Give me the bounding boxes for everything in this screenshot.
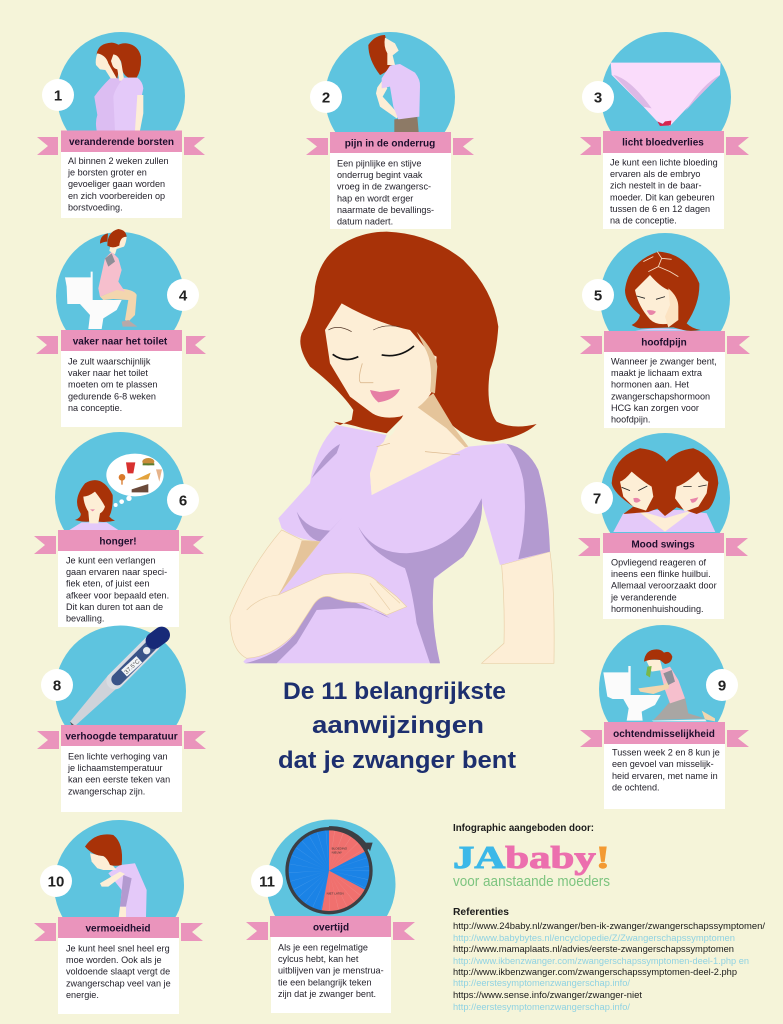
number 3: 3 xyxy=(594,90,602,106)
panel: 5 hoofdpijn xyxy=(580,233,750,428)
text box xyxy=(58,551,179,627)
number 11 xyxy=(251,865,283,897)
text box: Opvliegend reageren of xyxy=(611,558,707,568)
text box: energie. xyxy=(66,990,99,1000)
references xyxy=(453,906,766,1012)
icon: two faces back to back xyxy=(612,448,718,532)
text box: Je kunt een lichte bloeding xyxy=(610,158,718,168)
hair xyxy=(300,232,537,442)
text box: onderrug begint vaak xyxy=(337,170,423,180)
text box: moe worden. Ook als je xyxy=(66,955,162,965)
number 5 xyxy=(582,279,614,311)
logo: JAbaby: voor aanstaande moeders xyxy=(453,873,610,890)
text box: Je zult waarschijnlijk xyxy=(68,356,151,366)
text box: tie een belangrijk teken xyxy=(278,977,372,987)
text box: Een pijnlijke en stijve xyxy=(337,158,421,168)
title: De 11 belangrijkste xyxy=(283,678,506,705)
text box xyxy=(330,153,451,229)
icon: woman holding lower back xyxy=(368,35,420,132)
text box: hormonenhuishouding. xyxy=(611,604,704,614)
number 11: 11 xyxy=(259,874,275,890)
text box xyxy=(603,553,724,619)
text box: je veranderende xyxy=(610,592,677,602)
text box: naarmate de bevallings- xyxy=(337,205,434,215)
text box: kan een eerste teken van xyxy=(68,775,170,785)
banner: veranderende borsten xyxy=(69,137,174,148)
number 1 xyxy=(42,79,74,111)
text box: bevalling. xyxy=(66,614,104,624)
banner: overtijd xyxy=(313,922,349,934)
face xyxy=(325,303,437,418)
arm crease xyxy=(247,582,400,610)
text box: ervaren als de embryo xyxy=(610,169,700,179)
number 6: 6 xyxy=(179,492,187,510)
number 7 xyxy=(581,482,613,514)
right arm xyxy=(482,552,554,663)
icon: menstrual cycle wheel: NIEUW xyxy=(332,850,342,854)
icon: thermometer: 37.5°C xyxy=(124,658,142,676)
text box: Een lichte verhoging van xyxy=(68,752,168,762)
references: http://www.babybytes.nl/encyclopedie/Z/Zwangerschapssymptomen xyxy=(453,933,735,943)
banner xyxy=(36,330,206,354)
number 10 xyxy=(40,865,72,897)
text box: je borsten groter en xyxy=(67,168,147,178)
references: Referenties xyxy=(453,906,509,918)
icon: woman with headache xyxy=(625,252,701,331)
left arm shadow xyxy=(278,541,320,595)
text box: tussen de 6 en 12 dagen xyxy=(610,204,710,214)
banner xyxy=(246,916,415,940)
icon: hungry woman with thought bubble xyxy=(69,454,164,530)
text box: hap en wordt erger xyxy=(337,193,413,203)
text box: moeten om te plassen xyxy=(68,380,157,390)
text box: Als je een regelmatige xyxy=(278,942,368,952)
number 2: 2 xyxy=(322,90,330,106)
text box: Tussen week 2 en 8 kun je xyxy=(612,748,720,758)
references: https://www.sense.info/zwanger/zwanger-niet xyxy=(453,990,643,1000)
references: http://eerstesymptomenzwangerschap.info/ xyxy=(453,1002,631,1012)
references: http://www.ikbenzwanger.com/zwangerschapssymptomen-deel-1.php en xyxy=(453,956,749,966)
logo: JAbaby xyxy=(453,839,610,890)
icon: woman vomiting over toilet xyxy=(603,649,715,721)
banner xyxy=(578,533,748,556)
banner xyxy=(580,722,749,747)
mouth xyxy=(370,389,400,402)
number 4: 4 xyxy=(179,288,188,304)
neck shadow xyxy=(417,393,468,447)
text box xyxy=(604,744,725,809)
text box: Je kunt een verlangen xyxy=(66,556,156,566)
references: http://www.24baby.nl/zwanger/ben-ik-zwanger/zwangerschapssymptomen/ xyxy=(453,921,766,931)
banner xyxy=(580,131,749,155)
neck xyxy=(370,393,468,495)
icon: woman on toilet xyxy=(65,229,137,329)
panel: 6 honger xyxy=(34,432,204,627)
banner: Mood swings xyxy=(631,540,695,550)
text box: Allemaal veroorzaakt door xyxy=(611,581,717,591)
text box xyxy=(61,351,182,427)
text box: gedurende 6-8 weken xyxy=(68,391,156,401)
text box xyxy=(58,938,179,1014)
text box: Je kunt heel snel heel erg xyxy=(66,944,170,954)
text box: ineens een flinke huilbui. xyxy=(611,569,711,579)
shirt shading xyxy=(297,444,550,663)
icon: two women in profile xyxy=(94,43,143,131)
banner: hoofdpijn xyxy=(641,338,687,348)
text box: na de conceptie. xyxy=(610,216,677,226)
text box xyxy=(604,352,725,428)
text box: gaan ervaren naar speci- xyxy=(66,567,167,577)
eyes xyxy=(333,346,414,359)
text box: heid ervaren, met name in xyxy=(612,771,718,781)
face shadow xyxy=(417,332,437,393)
logo: JAbaby: JA baby ! xyxy=(453,839,610,875)
references: http://eerstesymptomenzwangerschap.info/ xyxy=(453,978,631,988)
banner xyxy=(34,917,203,941)
icon: tired woman bent forward xyxy=(85,834,147,917)
banner xyxy=(37,725,206,749)
banner xyxy=(580,331,750,354)
title xyxy=(278,678,516,774)
icon: menstrual cycle wheel xyxy=(287,828,373,913)
text box: gevoeliger gaan worden xyxy=(68,179,165,189)
text box: hormonen aan. Het xyxy=(611,380,689,390)
references: http://www.ikbenzwanger.com/zwangerschapssymptomen-deel-2.php xyxy=(453,967,737,977)
text box: zwangerschap veel van je xyxy=(66,978,171,988)
text box: borstvoeding. xyxy=(68,202,123,212)
panel: 4 vaker naar het toilet xyxy=(36,229,206,427)
nose xyxy=(359,363,373,383)
title: aanwijzingen xyxy=(312,712,484,739)
number 3 xyxy=(582,81,614,113)
title: dat je zwanger bent xyxy=(278,747,516,774)
banner: ochtendmisselijkheid xyxy=(613,729,715,740)
references: http://www.mamaplaats.nl/advies/eerste-zwangerschapssymptomen xyxy=(453,944,734,954)
panel: 10 vermoeidheid xyxy=(34,820,203,1014)
text box: zich nestelt in de baar- xyxy=(610,181,702,191)
text box: voldoende slaapt vergt de xyxy=(66,967,170,977)
text box: uitblijven van je menstrua- xyxy=(278,966,384,976)
banner: vermoeidheid xyxy=(85,924,151,934)
banner: vaker naar het toilet xyxy=(73,336,168,348)
text box: afkeer voor bepaald eten. xyxy=(66,590,169,600)
shirt xyxy=(243,425,550,663)
text box: datum nadert. xyxy=(337,216,393,226)
text box: Dit kan duren tot aan de xyxy=(66,602,163,612)
banner xyxy=(34,530,204,554)
banner xyxy=(306,132,474,155)
text box: zwangerschap zijn. xyxy=(68,786,145,796)
text box: na conceptie. xyxy=(68,403,122,413)
left arm and hand xyxy=(230,530,407,658)
text box: en zich voorbereiden op xyxy=(68,191,165,201)
number 1: 1 xyxy=(54,88,62,104)
text box: vaker naar het toilet xyxy=(68,368,148,378)
text box: hoofdpijn. xyxy=(611,414,650,424)
banner: verhoogde temparatuur xyxy=(65,732,178,742)
number 2 xyxy=(310,81,342,113)
number 9: 9 xyxy=(718,678,726,694)
panel: 3 licht bloedverlies xyxy=(580,32,749,229)
number 4 xyxy=(167,279,199,311)
text box: HCG kan zorgen voor xyxy=(611,403,699,413)
banner: pijn in de onderrug xyxy=(345,138,435,150)
brows xyxy=(328,326,400,332)
text box: Wanneer je zwanger bent, xyxy=(611,356,717,366)
banner xyxy=(37,130,205,155)
icon: underwear with blood drops xyxy=(611,63,721,126)
credit heading: Infographic aangeboden door: xyxy=(453,822,594,834)
number 8: 8 xyxy=(53,678,61,694)
panel: 11 overtijd xyxy=(246,820,415,1013)
panel: 2 pijn in de onderrug xyxy=(306,32,474,229)
text box: cylcus hebt, kan het xyxy=(278,954,359,964)
text box: maakt je lichaam extra xyxy=(611,368,703,378)
number 7: 7 xyxy=(593,490,601,508)
panel: 7 mood swings xyxy=(578,433,748,619)
number 9 xyxy=(706,669,738,701)
text box xyxy=(271,937,391,1013)
panel: 9 ochtendmisselijkheid xyxy=(580,625,749,809)
number 10: 10 xyxy=(48,874,64,890)
text box: een gevoel van misselijk- xyxy=(612,759,714,769)
icon: menstrual cycle wheel: NIET LATEN xyxy=(327,892,344,896)
text box xyxy=(61,152,182,218)
icon: menstrual cycle wheel: BLOEDING xyxy=(332,846,348,850)
text box: de ochtend. xyxy=(612,783,660,793)
text box: je lichaamstemperatuur xyxy=(67,763,163,773)
collar lines xyxy=(377,443,460,455)
text box: vroeg in de zwangersc- xyxy=(337,182,431,192)
text box: fiek eten, of juist een xyxy=(66,579,149,589)
banner: licht bloedverlies xyxy=(622,138,704,148)
text box: Al binnen 2 weken zullen xyxy=(68,156,169,166)
icon: thermometer xyxy=(70,635,162,726)
text box xyxy=(603,153,724,229)
number 6 xyxy=(167,484,199,516)
text box xyxy=(61,746,182,812)
text box: moeder. Dit kan gebeuren xyxy=(610,192,715,202)
text box: zijn dat je zwanger bent. xyxy=(278,989,376,999)
panel: 1 veranderende borsten xyxy=(37,32,205,218)
number 8 xyxy=(41,669,73,701)
panel: 8 verhoogde temparatuur xyxy=(37,626,206,812)
number 5: 5 xyxy=(594,288,602,304)
banner: honger! xyxy=(99,536,137,548)
illustration: pregnant woman xyxy=(230,232,554,663)
text box: zwangerschapshormoon xyxy=(611,391,710,401)
